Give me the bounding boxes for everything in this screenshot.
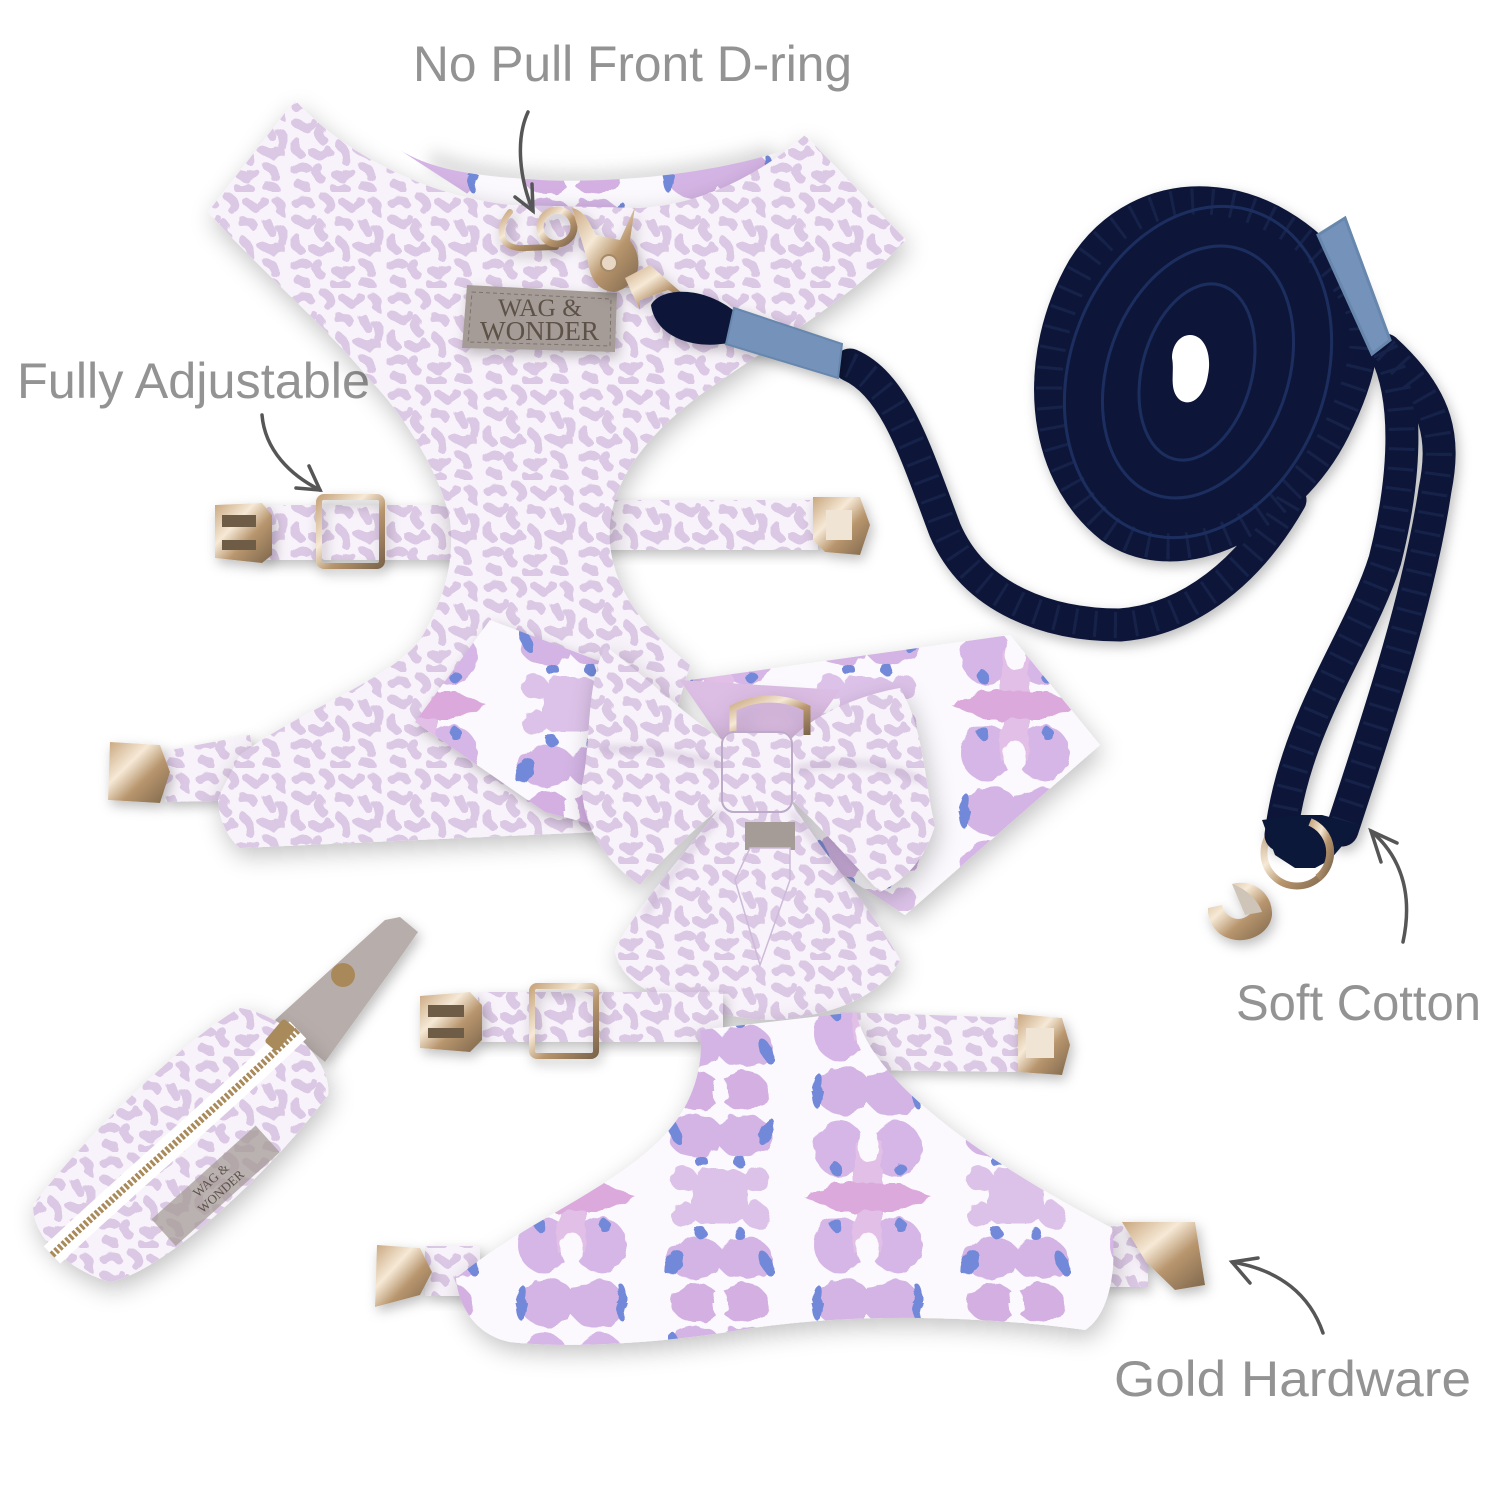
hidden tag: [745, 822, 795, 850]
leash end near clasp: [651, 292, 842, 378]
inkblot flap behind the bow, left: [415, 620, 610, 825]
label: Gold Hardware: Gold Hardware: [1114, 1351, 1471, 1407]
arrow: soft cotton: [1371, 831, 1407, 942]
fold: [735, 848, 790, 965]
lower clip: [108, 742, 170, 803]
lower strap left: [160, 735, 260, 802]
bow right wing: [786, 688, 935, 892]
side strap right: [600, 500, 818, 550]
slider: [319, 497, 382, 566]
clip lower right: [1122, 1222, 1205, 1290]
lining seen above the knot: [680, 680, 840, 745]
pouch label: WAG &: [190, 1160, 232, 1200]
hardware, lower harness: [375, 986, 1205, 1307]
arrow: front D-ring: [515, 112, 533, 211]
strap right: [840, 1012, 1022, 1072]
top harness with leopard print: [160, 100, 906, 848]
brand label: WAG &: [498, 295, 582, 322]
buckle left: [215, 503, 272, 563]
inkblot flap behind the bow, right: [690, 635, 1100, 915]
neck lining: [392, 145, 800, 215]
snap button: [331, 963, 355, 987]
slider: [532, 986, 596, 1056]
coil solid mass: [1049, 201, 1363, 546]
clip lower left: [375, 1245, 432, 1307]
front arc of the ring: [1310, 822, 1330, 878]
leash coil with rope ends: [850, 168, 1439, 835]
bow tails: [615, 800, 900, 1020]
title label: No Pull Front D-ring: No Pull Front D-ring: [413, 36, 852, 92]
small strap lower right: [1100, 1225, 1148, 1287]
buckle top left: [420, 992, 482, 1052]
charm on the leash end: [1208, 883, 1272, 940]
side strap left: [262, 505, 462, 560]
side hardware, top harness: [108, 497, 870, 803]
waste bag pouch: [33, 917, 418, 1282]
arrow: gold hardware: [1232, 1258, 1323, 1333]
neck shadow: [430, 145, 780, 192]
lower harness, inkblot print: [425, 992, 1148, 1345]
bow fold shading: [600, 749, 920, 915]
label: Soft Cotton: Soft Cotton: [1236, 975, 1481, 1031]
end ring of the leash: [1264, 820, 1330, 886]
pouch body: [33, 1008, 328, 1282]
strap left: [478, 992, 723, 1042]
fabric bow: [582, 646, 935, 1020]
pouch label: [152, 1126, 280, 1246]
pouch label: WONDER: [194, 1166, 247, 1216]
buckle right: [813, 497, 870, 555]
leather strap: [275, 917, 418, 1062]
clip top right: [1018, 1014, 1070, 1075]
small strap lower left: [425, 1246, 480, 1296]
label: Fully Adjustable: Fully Adjustable: [17, 353, 370, 409]
small gold ring: [733, 699, 807, 735]
sleeve: [726, 308, 842, 378]
zipper: [52, 1030, 298, 1255]
brand label: WONDER: [480, 316, 599, 346]
rope sleeve: coil: [1318, 218, 1390, 354]
bow knot: [722, 732, 792, 812]
body: [456, 1012, 1113, 1345]
brand label: [462, 285, 617, 352]
harness body: [208, 100, 906, 848]
rope passing through the ring: [1262, 815, 1360, 868]
coil centre hole: [1172, 335, 1209, 402]
arrow: fully adjustable: [262, 415, 320, 490]
front D-ring and clasp: [502, 207, 692, 310]
bow left wing: [582, 646, 730, 885]
zipper pull: [264, 1018, 296, 1052]
